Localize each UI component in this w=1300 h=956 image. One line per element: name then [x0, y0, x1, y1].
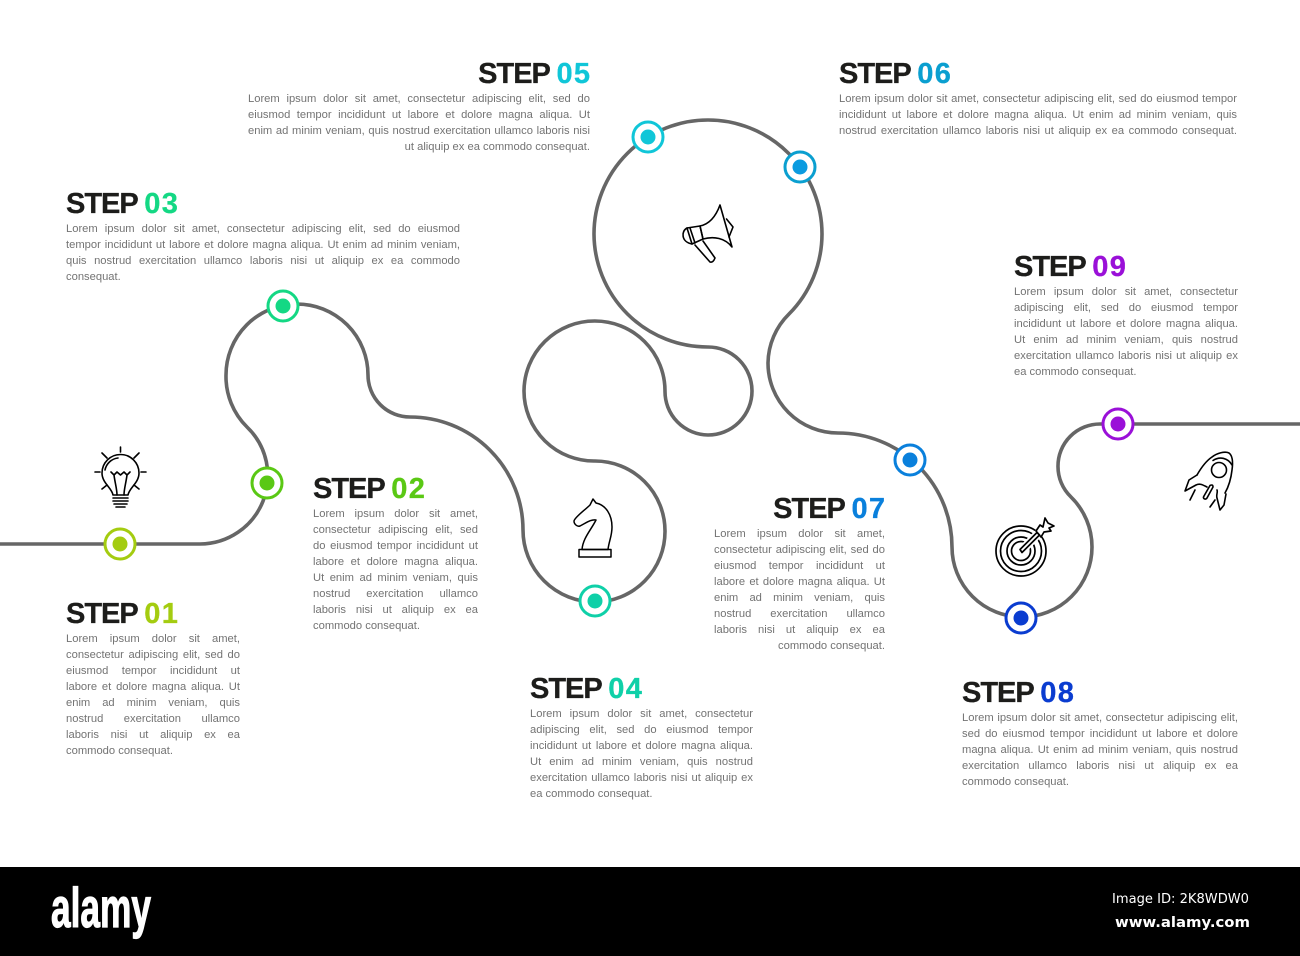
footer image id: Image ID: 2K8WDW0	[1112, 892, 1249, 907]
text block: step 05: Lorem ipsum dolor sit amet, consectetur adipiscing elit, sed do	[248, 93, 590, 105]
heading: step 01: STEP 01	[66, 598, 179, 630]
text block: step 06	[839, 93, 1237, 137]
node: step 01	[105, 529, 135, 559]
text block: step 02: laboris nisi ut aliquip ex ea	[313, 604, 478, 616]
text block: step 01: nostrud exercitation ullamco	[66, 713, 240, 725]
text block: step 01: laboris nisi ut aliquip ex ea	[66, 729, 240, 741]
node: step 07	[895, 445, 925, 475]
text block: step 09: Lorem ipsum dolor sit amet, consectetur	[1014, 286, 1238, 298]
panel: step 01	[66, 598, 240, 757]
text block: step 04: adipiscing elit, sed do eiusmod tempor	[530, 724, 753, 736]
text block: step 01: consectetur adipiscing elit, sed do	[66, 649, 240, 661]
text block: step 04: ea commodo consequat.	[530, 788, 653, 800]
node: step 02	[252, 468, 282, 498]
text block: step 08: commodo consequat.	[962, 776, 1069, 788]
text block: step 06: incididunt ut labore et dolore magna aliqua. Ut enim ad minim veniam, quis	[839, 109, 1237, 121]
text block: step 03: consequat.	[66, 271, 121, 283]
text block: step 04: incididunt ut labore et dolore magna aliqua.	[530, 740, 753, 752]
text block: step 02: consectetur adipiscing elit, sed	[313, 524, 478, 536]
text block: step 09: Ut enim ad minim veniam, quis nostrud	[1014, 334, 1238, 346]
heading: step 05: STEP 05	[478, 58, 591, 90]
node: step 06	[785, 152, 815, 182]
text block: step 01: Lorem ipsum dolor sit amet,	[66, 633, 240, 645]
icon: target with arrow	[996, 518, 1054, 576]
text block: step 09: exercitation ullamco laboris nisi ut aliquip ex	[1014, 350, 1238, 362]
panel: step 05	[248, 58, 591, 153]
text block: step 08: exercitation ullamco laboris nisi ut aliquip ex ea	[962, 760, 1238, 772]
text block: step 07: eiusmod tempor incididunt ut	[714, 560, 885, 572]
heading: step 02: STEP 02	[313, 473, 426, 505]
node: step 09	[1103, 409, 1133, 439]
text block: step 04: Lorem ipsum dolor sit amet, consectetur	[530, 708, 753, 720]
icon: megaphone	[683, 205, 733, 262]
text block: step 01: enim ad minim veniam, quis	[66, 697, 240, 709]
text block: step 01: eiusmod tempor incididunt ut	[66, 665, 240, 677]
text block: step 01: commodo consequat.	[66, 745, 173, 757]
heading: step 04: STEP 04	[530, 673, 643, 705]
text block: step 09: ea commodo consequat.	[1014, 366, 1137, 378]
heading: step 08: STEP 08	[962, 677, 1075, 709]
text block: step 05: enim ad minim veniam, quis nostrud exercitation ullamco laboris nisi	[248, 125, 590, 137]
heading: step 09: STEP 09	[1014, 251, 1127, 283]
text block: step 07	[714, 528, 885, 652]
panel: step 08	[962, 677, 1238, 788]
text block: step 07: nostrud exercitation ullamco	[714, 608, 885, 620]
footer bar	[0, 867, 1300, 956]
text block: step 07: enim ad minim veniam, quis	[714, 592, 885, 604]
text block: step 09	[1014, 286, 1238, 378]
node: step 03	[268, 291, 298, 321]
text block: step 08: Lorem ipsum dolor sit amet, consectetur adipiscing elit,	[962, 712, 1238, 724]
text block: step 08: magna aliqua. Ut enim ad minim veniam, quis nostrud	[962, 744, 1238, 756]
node: step 05	[633, 122, 663, 152]
text block: step 02: Lorem ipsum dolor sit amet,	[313, 508, 478, 520]
text block: step 07: Lorem ipsum dolor sit amet,	[714, 528, 885, 540]
heading: step 06: STEP 06	[839, 58, 952, 90]
text block: step 09: adipiscing elit, sed do eiusmod tempor	[1014, 302, 1238, 314]
text block: step 07: labore et dolore magna aliqua. Ut	[714, 576, 885, 588]
text block: step 03: quis nostrud exercitation ullamco laboris nisi ut aliquip ex ea commodo	[66, 255, 460, 267]
panel: step 07	[714, 493, 886, 652]
text block: step 03	[66, 223, 460, 283]
footer website: www.alamy.com	[1115, 915, 1250, 931]
panel: step 09	[1014, 251, 1238, 378]
text block: step 02: nostrud exercitation ullamco	[313, 588, 478, 600]
text block: step 02: Ut enim ad minim veniam, quis	[313, 572, 478, 584]
text block: step 06: Lorem ipsum dolor sit amet, consectetur adipiscing elit, sed do eiusmod tempor	[839, 93, 1237, 105]
winding road line	[0, 120, 1300, 617]
text block: step 06: nostrud exercitation ullamco laboris nisi ut aliquip ex ea commodo consequat.	[839, 125, 1237, 137]
text block: step 08: sed do eiusmod tempor incididunt ut labore et dolore	[962, 728, 1238, 740]
text block: step 07: commodo consequat.	[778, 640, 885, 652]
panel: step 03	[66, 188, 460, 283]
heading: step 07: STEP 07	[773, 493, 886, 525]
text block: step 09: incididunt ut labore et dolore magna aliqua.	[1014, 318, 1238, 330]
text block: step 05	[248, 93, 590, 153]
text block: step 08	[962, 712, 1238, 788]
text block: step 04: exercitation ullamco laboris nisi ut aliquip ex	[530, 772, 753, 784]
panel: step 06	[839, 58, 1237, 137]
icon: rocket	[1185, 452, 1233, 510]
text block: step 01: labore et dolore magna aliqua. Ut	[66, 681, 240, 693]
panel: step 02	[313, 473, 478, 632]
text block: step 04	[530, 708, 753, 800]
icon: chess knight	[574, 499, 612, 557]
text block: step 07: laboris nisi ut aliquip ex ea	[714, 624, 885, 636]
text block: step 04: Ut enim ad minim veniam, quis nostrud	[530, 756, 753, 768]
text block: step 03: tempor incididunt ut labore et dolore magna aliqua. Ut enim ad minim veniam,	[66, 239, 460, 251]
text block: step 05: eiusmod tempor incididunt ut labore et dolore magna aliqua. Ut	[248, 109, 590, 121]
text block: step 02: commodo consequat.	[313, 620, 420, 632]
panel: step 04	[530, 673, 753, 800]
text block: step 03: Lorem ipsum dolor sit amet, consectetur adipiscing elit, sed do eiusmod	[66, 223, 460, 235]
footer logo: alamy: alamy	[51, 876, 151, 939]
text block: step 02	[313, 508, 478, 632]
text block: step 01	[66, 633, 240, 757]
text block: step 07: consectetur adipiscing elit, sed do	[714, 544, 885, 556]
node: step 08	[1006, 603, 1036, 633]
icon: light bulb	[95, 447, 146, 507]
text block: step 02: labore et dolore magna aliqua.	[313, 556, 478, 568]
text block: step 02: do eiusmod tempor incididunt ut	[313, 540, 478, 552]
node: step 04	[580, 586, 610, 616]
heading: step 03: STEP 03	[66, 188, 179, 220]
text block: step 05: ut aliquip ex ea commodo consequat.	[405, 141, 590, 153]
